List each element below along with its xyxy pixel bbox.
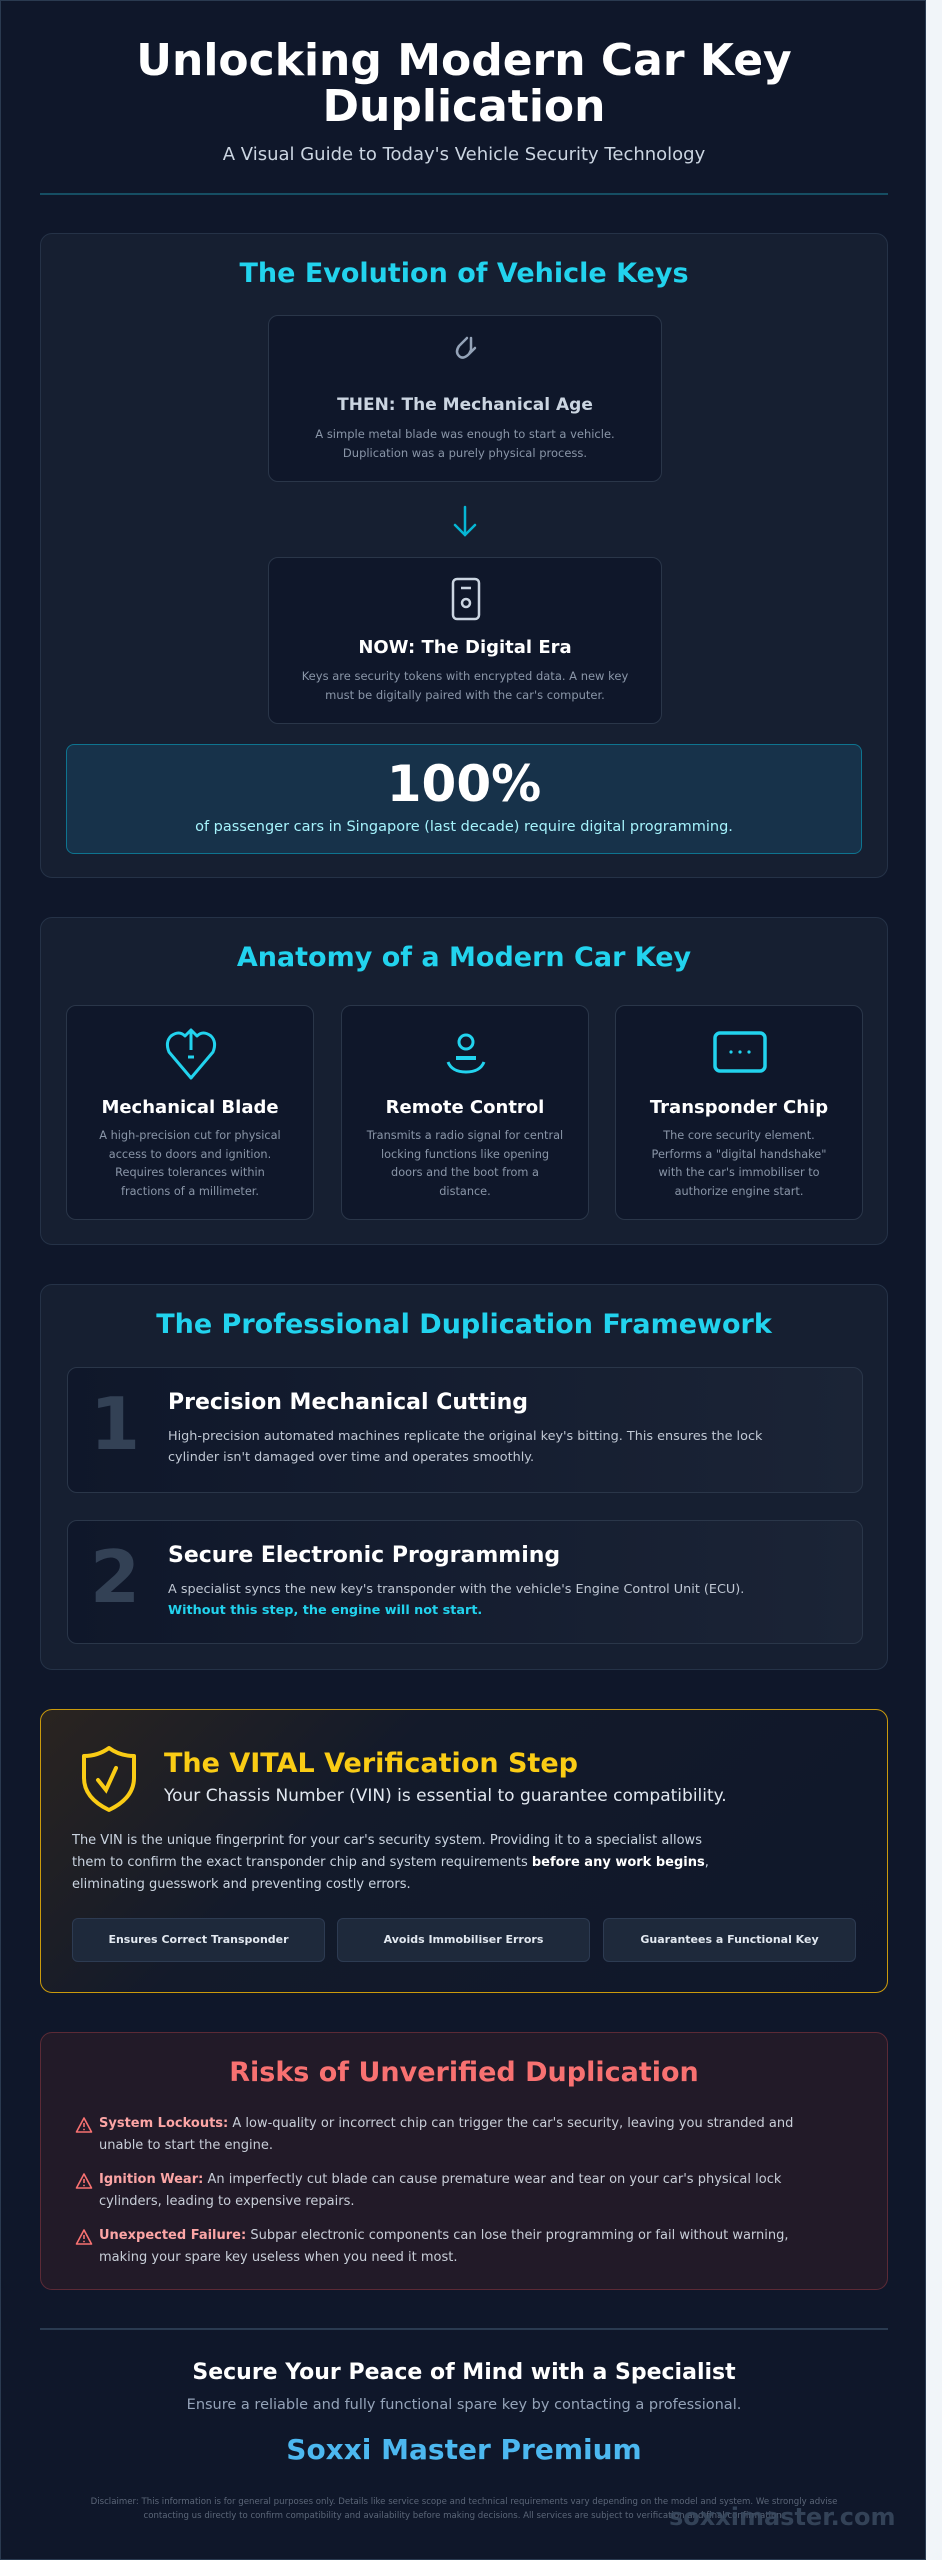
icon: chip <box>713 1031 767 1073</box>
step 2 desc <box>168 1582 744 1618</box>
stat number: 100% <box>387 755 541 813</box>
panel: framework <box>40 1284 888 1670</box>
title <box>136 35 792 132</box>
verification title: The VITAL Verification Step <box>164 1748 578 1779</box>
panel: anatomy <box>40 917 888 1245</box>
panel: verification <box>40 1709 888 1993</box>
step 2 <box>67 1520 863 1644</box>
text: then title: THEN: The Mechanical Age <box>337 395 593 415</box>
card: chip <box>615 1005 863 1220</box>
verification body: The VIN is the unique fingerprint for your car's security system. Providing it to a specialist allows them to confirm the exact transponder chip and system requirements before any work begins, eliminating guesswork and preventing costly errors. <box>72 1833 709 1892</box>
step 1 title: Precision Mechanical Cutting <box>168 1390 528 1415</box>
title: Unlocking Modern Car Key <box>136 35 792 86</box>
text: chip title: Transponder Chip <box>650 1097 828 1118</box>
step 1 <box>67 1367 863 1493</box>
card: remote <box>341 1005 589 1220</box>
number 2: 2 <box>90 1535 140 1619</box>
step 2 desc: Without this step, the engine will not start. <box>168 1603 482 1618</box>
risk 1: System Lockouts: A low-quality or incorrect chip can trigger the car's security, leaving you stranded and unable to start the engine. <box>99 2116 793 2153</box>
card: blade <box>66 1005 314 1220</box>
heading: anatomy: Anatomy of a Modern Car Key <box>237 942 691 973</box>
stat box: 100% <box>66 744 862 854</box>
footer subline: Ensure a reliable and fully functional spare key by contacting a professional. <box>187 2397 741 2413</box>
brand: Soxxi Master Premium <box>286 2433 642 2466</box>
chip: transponder: Ensures Correct Transponder <box>108 1933 289 1946</box>
heading: risks: Risks of Unverified Duplication <box>229 2057 699 2088</box>
icon: remote <box>446 1034 486 1074</box>
text: chip desc: The core security element. Performs a "digital handshake" with the car's immobiliser to authorize engine start. <box>652 1129 826 1198</box>
step 2 title: Secure Electronic Programming <box>168 1543 560 1568</box>
subtitle: A Visual Guide to Today's Vehicle Security Technology <box>223 144 705 165</box>
chip: functional: Guarantees a Functional Key <box>640 1933 819 1946</box>
heading: evolution: The Evolution of Vehicle Keys <box>239 258 689 289</box>
chip: transponder <box>72 1918 325 1962</box>
chip: immobiliser: Avoids Immobiliser Errors <box>384 1933 543 1946</box>
disclaimer: Disclaimer: This information is for general purposes only. Details like service scope and technical requirements vary depending on the model and system. We strongly advise contacting us directly to confirm compatibility and availability before making decisions. All services are subject to verification and final confirmation. <box>91 2497 837 2521</box>
number 1: 1 <box>90 1382 140 1466</box>
icon: shield <box>82 1746 136 1812</box>
text: now desc: must be digitally paired with the car's computer. <box>325 688 605 702</box>
text: remote title: Remote Control <box>386 1097 544 1118</box>
text: blade title: Mechanical Blade <box>101 1097 279 1118</box>
watermark: soxximaster.com <box>669 2503 895 2531</box>
icon: blade <box>166 1028 216 1080</box>
chip: functional <box>603 1918 856 1962</box>
text: then desc <box>315 427 615 460</box>
text: then desc: A simple metal blade was enough to start a vehicle. <box>315 427 615 441</box>
step 2 desc: A specialist syncs the new key's transponder with the vehicle's Engine Control Unit (ECU). <box>168 1582 744 1597</box>
risk 3: Unexpected Failure: Subpar electronic components can lose their programming or fail without warning, making your spare key useless when you need it most. <box>99 2228 789 2265</box>
text: remote desc: Transmits a radio signal for central locking functions like opening doors and the boot from a distance. <box>367 1129 563 1198</box>
footer heading: Secure Your Peace of Mind with a Specialist <box>192 2360 736 2385</box>
step 1 desc: High-precision automated machines replicate the original key's bitting. This ensures the lock cylinder isn't damaged over time and operates smoothly. <box>168 1429 762 1465</box>
text: now desc <box>302 669 628 702</box>
text: blade desc: A high-precision cut for physical access to doors and ignition. Requires tolerances within fractions of a millimeter. <box>99 1129 281 1198</box>
arrow: down <box>454 506 476 537</box>
text: now desc: Keys are security tokens with encrypted data. A new key <box>302 669 628 683</box>
panel: evolution <box>40 233 888 878</box>
title: Duplication <box>323 81 605 132</box>
card: now <box>268 557 662 724</box>
card: then <box>268 315 662 482</box>
heading: framework: The Professional Duplication Framework <box>156 1309 772 1340</box>
text: then desc: Duplication was a purely physical process. <box>343 446 587 460</box>
icon: key blade <box>456 336 476 359</box>
risk 2: Ignition Wear: An imperfectly cut blade can cause premature wear and tear on your car's physical lock cylinders, leading to expensive repairs. <box>99 2172 781 2209</box>
chip: immobiliser <box>337 1918 590 1962</box>
icon: fob <box>452 578 480 620</box>
text: now title: NOW: The Digital Era <box>358 637 572 658</box>
stat caption: of passenger cars in Singapore (last decade) require digital programming. <box>195 819 733 835</box>
panel: risks <box>40 2032 888 2290</box>
verification subtitle: Your Chassis Number (VIN) is essential to guarantee compatibility. <box>164 1786 727 1806</box>
